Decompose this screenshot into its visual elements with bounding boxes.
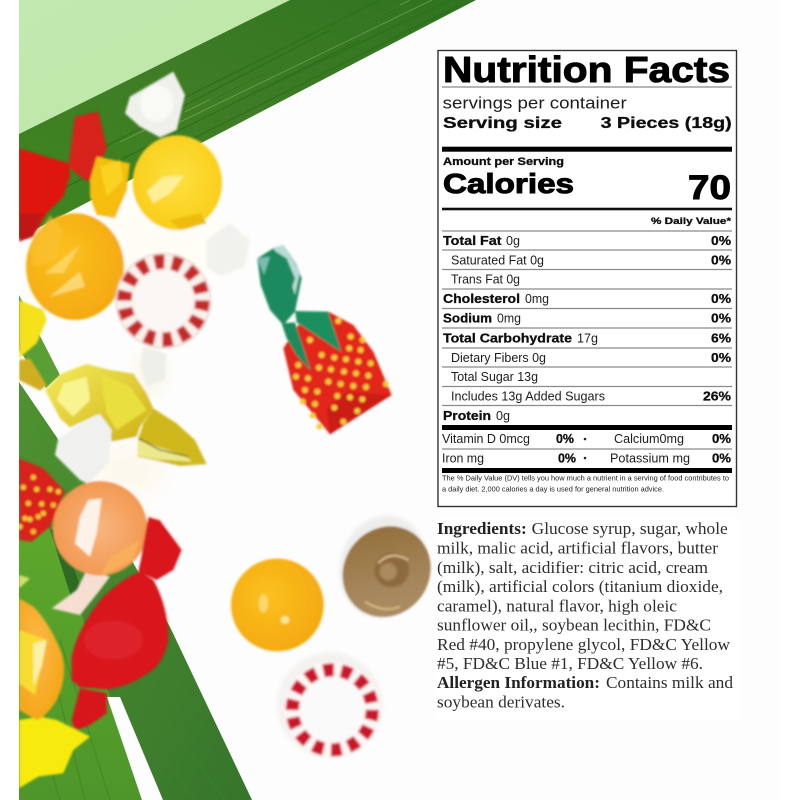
vitamins and minerals: Iron mg — [442, 451, 484, 466]
footnote: a daily diet. 2,000 calories a day is used for general nutrition advice. — [442, 485, 664, 494]
nutrient rows: Total Carbohydrate — [443, 331, 572, 346]
text block: ingredients and allergens: (milk), salt, acidifier: citric acid, cream — [437, 558, 708, 577]
pale green backdrop — [19, 0, 290, 134]
nutrient rows: 0% — [711, 311, 731, 326]
nutrient rows: 0mg — [525, 291, 549, 306]
candy: yellow wrapped — [133, 135, 222, 230]
nutrient rows: 17g — [577, 331, 598, 346]
footnote — [442, 474, 729, 494]
text block: ingredients and allergens: caramel), natural flavor, high oleic — [437, 597, 677, 616]
nutrient rows: Total Fat — [443, 233, 502, 248]
vitamins and minerals: Potassium mg — [610, 451, 690, 466]
text block: ingredients and allergens: Glucose syrup, sugar, whole — [532, 519, 728, 538]
calories: 70 — [688, 169, 731, 207]
nutrient rows — [442, 231, 732, 430]
nutrient rows: 0g — [506, 233, 520, 248]
panel: nutrition facts label — [438, 49, 736, 506]
text block: ingredients and allergens: #5, FD&C Blue #1, FD&C Yellow #6. — [437, 654, 703, 673]
nutrient rows: Dietary Fibers 0g — [451, 350, 546, 365]
nutrient rows: Total Sugar 13g — [451, 369, 538, 384]
vitamins and minerals: 0% — [558, 451, 576, 466]
nutrient rows: Saturated Fat 0g — [451, 252, 544, 268]
calories: Amount per Serving — [443, 156, 564, 168]
vitamins and minerals: 0% — [712, 431, 731, 446]
nutrient rows: Sodium — [443, 311, 492, 326]
candy and leaf photo — [17, 0, 476, 800]
lower left leaves — [19, 295, 252, 800]
candy: strawberry wrapped — [257, 245, 392, 434]
servings info: servings per container — [443, 94, 627, 112]
nutrient rows: Includes 13g Added Sugars — [451, 388, 605, 403]
vitamins and minerals: 0% — [712, 451, 731, 466]
nutrient rows: 0% — [711, 233, 731, 248]
footnote: The % Daily Value (DV) tells you how much a nutrient in a serving of food contributes to — [442, 474, 729, 483]
candy: yellow wrapper twist — [90, 157, 130, 218]
candy: gold foil wrapped — [19, 358, 207, 466]
nutrient rows: 0g — [496, 408, 510, 423]
top diagonal leaf — [19, 0, 476, 238]
candy: orange wrapped — [52, 481, 147, 615]
nutrient rows: 0% — [711, 252, 731, 268]
text block: ingredients and allergens: soybean derivates. — [437, 693, 565, 712]
nutrient rows: 0% — [711, 291, 731, 306]
nutrient rows: 26% — [703, 388, 731, 403]
vitamins and minerals: 0% — [556, 431, 574, 446]
text block: ingredients and allergens — [436, 518, 740, 720]
candy: caramel brown — [340, 516, 432, 619]
candy: small strawberry wrapped — [17, 458, 65, 542]
heading: nutrition facts: Nutrition Facts — [443, 49, 730, 90]
text block: ingredients and allergens: Ingredients: — [437, 519, 527, 538]
text block: ingredients and allergens: (milk), artificial colors (titanium dioxide, — [437, 577, 723, 596]
text block: ingredients and allergens: Contains milk and — [606, 673, 733, 692]
servings info: 3 Pieces (18g) — [601, 115, 732, 132]
candy: orange wrapped — [19, 213, 124, 358]
candy: red wrapped — [19, 112, 107, 242]
candy: orange and yellow wrapped, lower left — [19, 575, 90, 788]
text block: ingredients and allergens: sunflower oil,, soybean lecithin, FD&C — [437, 616, 711, 635]
nutrient rows: 0% — [711, 350, 731, 365]
text block: ingredients and allergens: Red #40, propylene glycol, FD&C Yellow — [437, 635, 731, 654]
vitamins and minerals — [442, 431, 732, 473]
candy: white wrapper over gold — [55, 414, 112, 484]
candies — [17, 72, 448, 788]
nutrient rows: 6% — [711, 331, 731, 346]
vitamins and minerals: Calcium0mg — [614, 431, 684, 446]
calories: % Daily Value* — [651, 216, 731, 227]
nutrient rows: 0mg — [497, 311, 521, 326]
candy: peppermint in wrapper — [116, 223, 250, 387]
servings info — [442, 87, 732, 152]
text block: ingredients and allergens: milk, malic acid, artificial flavors, butter — [437, 538, 718, 557]
text block: ingredients and allergens: Allergen Information: — [437, 673, 600, 692]
vitamins and minerals: Vitamin D 0mcg — [442, 431, 530, 446]
wrapper halos — [83, 194, 216, 576]
candy: round orange — [231, 559, 324, 651]
nutrient rows: Cholesterol — [443, 291, 520, 306]
calories — [442, 156, 732, 227]
candy: white wrapper twist — [125, 72, 185, 137]
candy: peppermint unwrapped — [277, 652, 383, 758]
calories: Calories — [443, 168, 574, 199]
nutrient rows: Protein — [443, 408, 491, 423]
nutrient rows: Trans Fat 0g — [451, 272, 520, 286]
candy: red wrapped, lower — [72, 517, 182, 731]
servings info: Serving size — [443, 115, 562, 132]
